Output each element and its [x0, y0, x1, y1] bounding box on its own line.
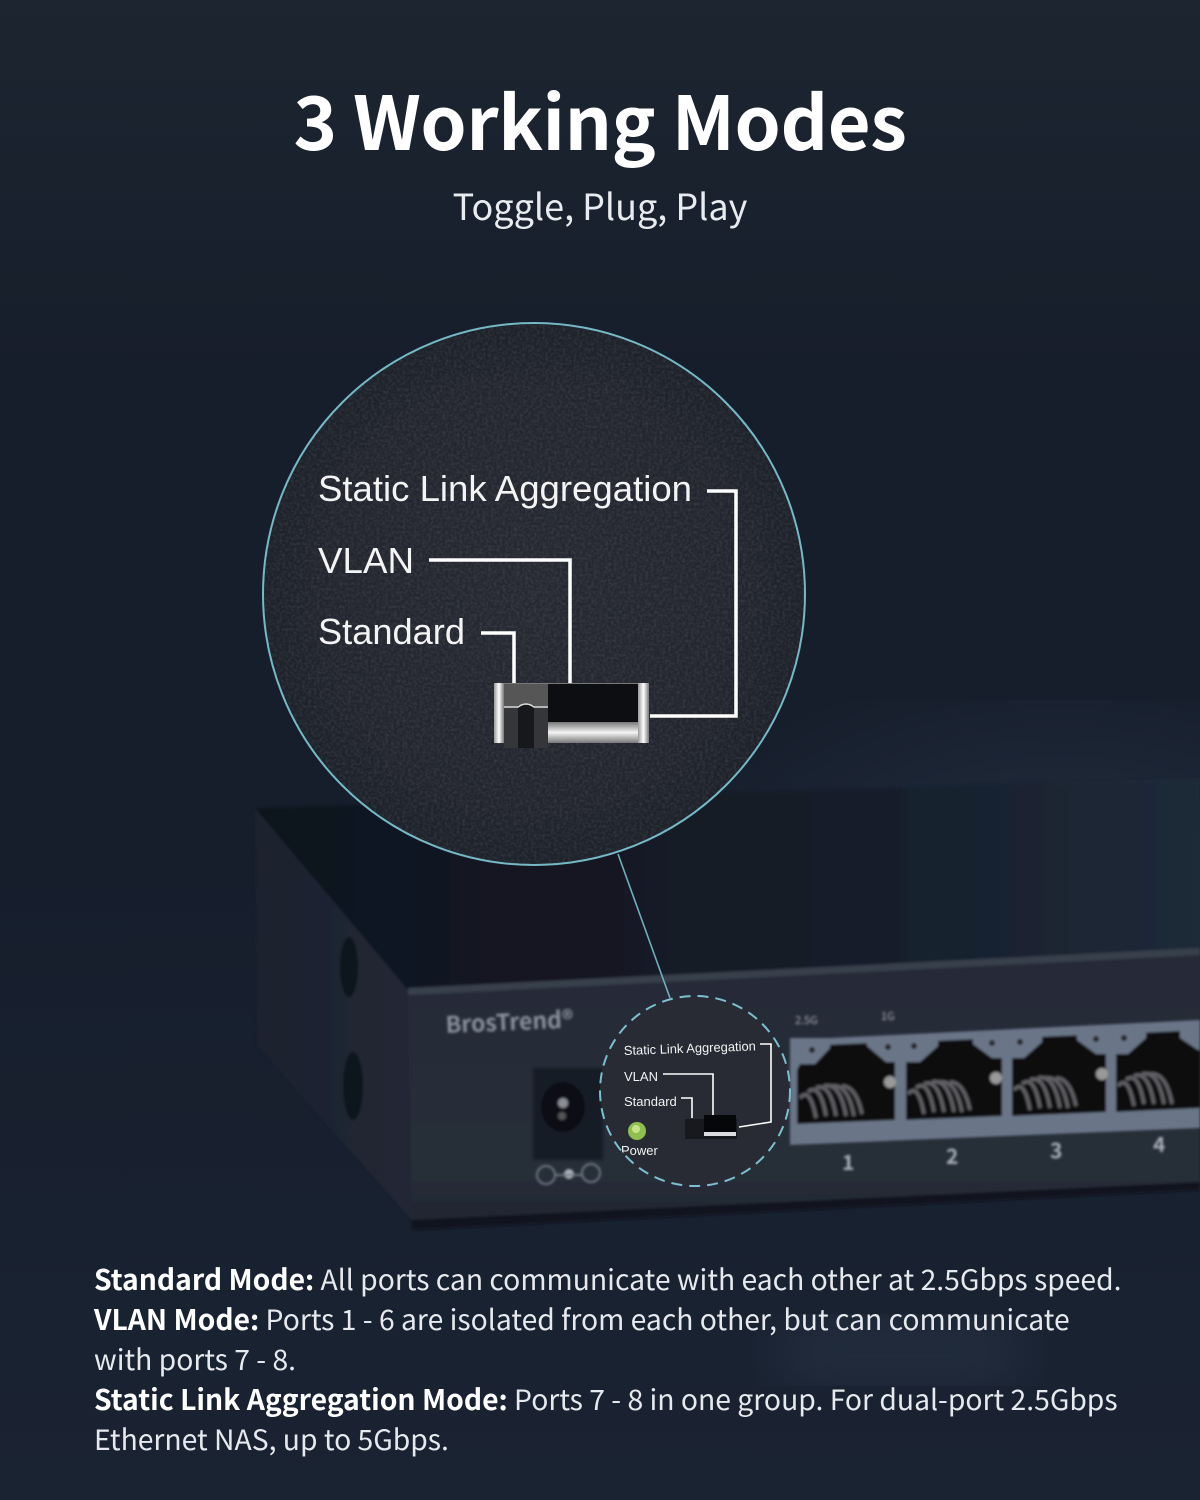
- port numbers: 3: [1050, 1135, 1062, 1165]
- port numbers: 1G: [881, 1008, 895, 1024]
- toggle switch: [494, 683, 649, 748]
- magnified circular callout: [263, 323, 805, 865]
- callout labels: Standard: [318, 611, 465, 652]
- mode descriptions: [94, 1258, 1122, 1459]
- power socket: [533, 1068, 603, 1184]
- mode descriptions: with ports 7 - 8.: [94, 1338, 296, 1379]
- leader lines: [429, 491, 736, 716]
- small dashed callout on the switch: Standard: [624, 1094, 677, 1109]
- title: 3 Working Modes: [293, 65, 907, 172]
- port numbers: 2: [946, 1141, 958, 1171]
- background and product illustration: [0, 322, 1200, 1500]
- subtitle: Toggle, Plug, Play: [453, 179, 747, 231]
- mode descriptions: VLAN Mode: Ports 1 - 6 are isolated from each other, but can communicate: [94, 1298, 1070, 1339]
- small dashed callout on the switch: Power: [621, 1143, 659, 1158]
- port numbers: [795, 1008, 1165, 1177]
- small dashed callout on the switch: [600, 996, 790, 1186]
- mode descriptions: Ethernet NAS, up to 5Gbps.: [94, 1418, 449, 1459]
- mode descriptions: Static Link Aggregation Mode: Ports 7 - 8 in one group. For dual-port 2.5Gbps: [94, 1378, 1118, 1419]
- port numbers: 1: [842, 1147, 854, 1177]
- port numbers: 2.5G: [795, 1012, 818, 1028]
- callout labels: VLAN: [318, 540, 414, 581]
- network switch: [255, 778, 1200, 1230]
- port numbers: 4: [1153, 1129, 1165, 1159]
- callout labels: [318, 468, 692, 652]
- small dashed callout on the switch: VLAN: [624, 1069, 658, 1084]
- connector line: [618, 854, 670, 998]
- ethernet ports: [790, 1020, 1200, 1145]
- mode descriptions: Standard Mode: All ports can communicate with each other at 2.5Gbps speed.: [94, 1258, 1122, 1299]
- brand label: BrosTrend®: [445, 1000, 574, 1040]
- small dashed callout on the switch: Static Link Aggregation: [624, 1038, 756, 1058]
- callout labels: Static Link Aggregation: [318, 468, 692, 509]
